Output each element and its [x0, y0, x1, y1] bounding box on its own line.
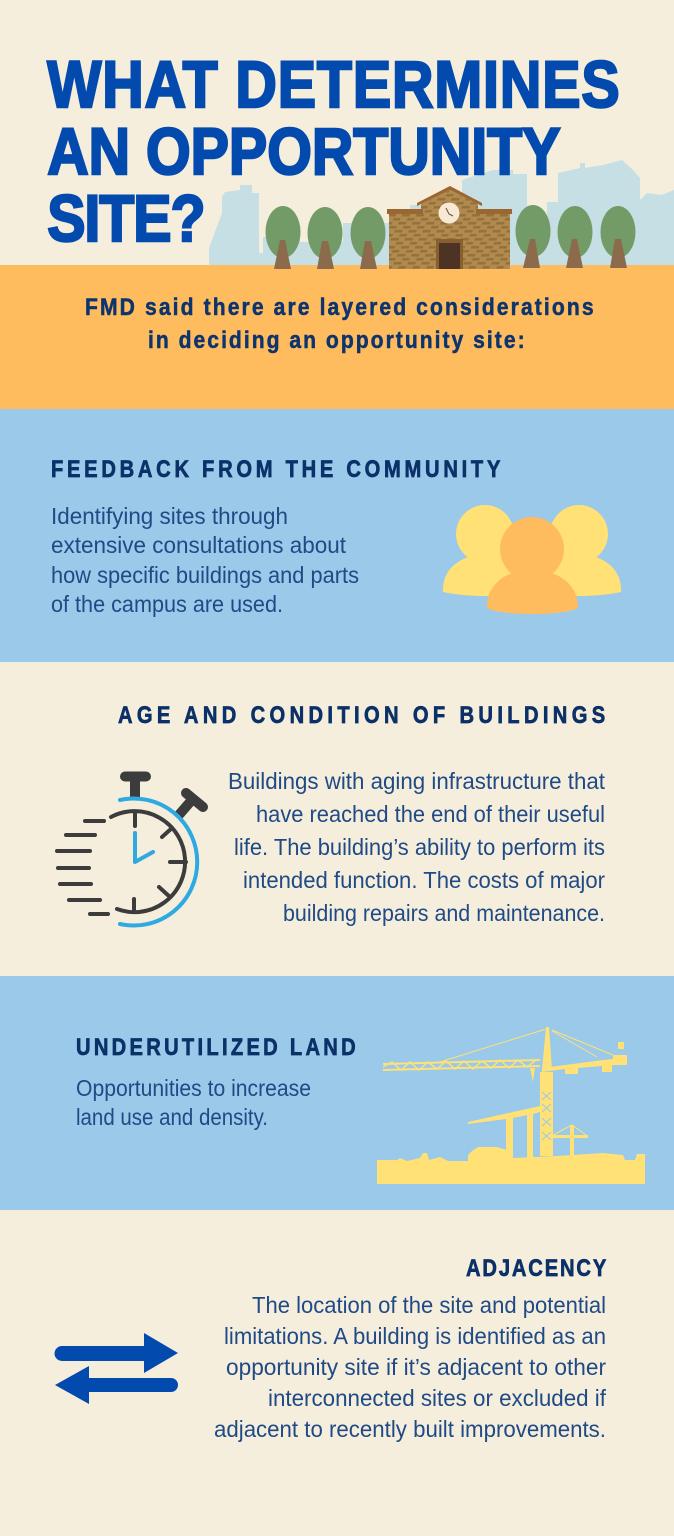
heading: underutilized land: UNDERUTILIZED LAND: [76, 1033, 356, 1060]
text: adjacency body: [214, 1292, 607, 1442]
panel: feedback from the community: [0, 409, 674, 662]
title: [47, 48, 620, 256]
text: feedback body: how specific buildings and parts: [51, 562, 359, 588]
text: adjacency body: interconnected sites or excluded if: [268, 1385, 607, 1411]
intro text: in deciding an opportunity site:: [148, 327, 525, 353]
heading: age and condition: AGE AND CONDITION OF BUILDINGS: [118, 701, 605, 728]
text: age body: [228, 768, 606, 926]
text: adjacency body: limitations. A building is identified as an: [224, 1323, 606, 1349]
orange band: [0, 265, 674, 409]
icon: stopwatch: [57, 776, 203, 926]
text: adjacency body: opportunity site if it’s adjacent to other: [226, 1354, 606, 1380]
intro text: FMD said there are layered considerations: [85, 294, 594, 320]
text: feedback body: [51, 503, 359, 617]
text: underutilized body: Opportunities to increase: [76, 1075, 311, 1101]
text: age body: building repairs and maintenance.: [283, 900, 605, 926]
text: feedback body: of the campus are used.: [51, 591, 283, 617]
title: SITE?: [47, 182, 206, 256]
text: adjacency body: The location of the site and potential: [252, 1292, 606, 1318]
text: underutilized body: land use and density.: [76, 1104, 268, 1130]
icon: people group: [443, 505, 621, 614]
text: feedback body: Identifying sites through: [51, 503, 288, 529]
heading: feedback: FEEDBACK FROM THE COMMUNITY: [51, 455, 501, 482]
skyline: [209, 160, 674, 266]
text: underutilized body: [76, 1075, 311, 1130]
icon: trees right: [516, 205, 636, 268]
heading: adjacency: ADJACENCY: [466, 1254, 606, 1281]
illustration: cranes and skyline: [377, 1027, 645, 1184]
text: adjacency body: adjacent to recently built improvements.: [214, 1416, 606, 1442]
panel: age and condition of buildings: [57, 701, 606, 926]
icon: clock tower building: [387, 186, 512, 269]
title: AN OPPORTUNITY: [47, 115, 560, 189]
panel: underutilized land: [0, 976, 674, 1210]
intro text: [85, 294, 594, 353]
icon: exchange arrows: [55, 1333, 178, 1404]
text: age body: intended function. The costs of major: [243, 867, 605, 893]
icon: trees left: [266, 206, 386, 269]
panel: adjacency: [55, 1254, 607, 1442]
text: age body: Buildings with aging infrastructure that: [228, 768, 606, 794]
title: WHAT DETERMINES: [47, 48, 620, 122]
text: age body: have reached the end of their useful: [256, 801, 605, 827]
text: feedback body: extensive consultations about: [51, 532, 347, 558]
text: age body: life. The building’s ability to perform its: [234, 834, 605, 860]
